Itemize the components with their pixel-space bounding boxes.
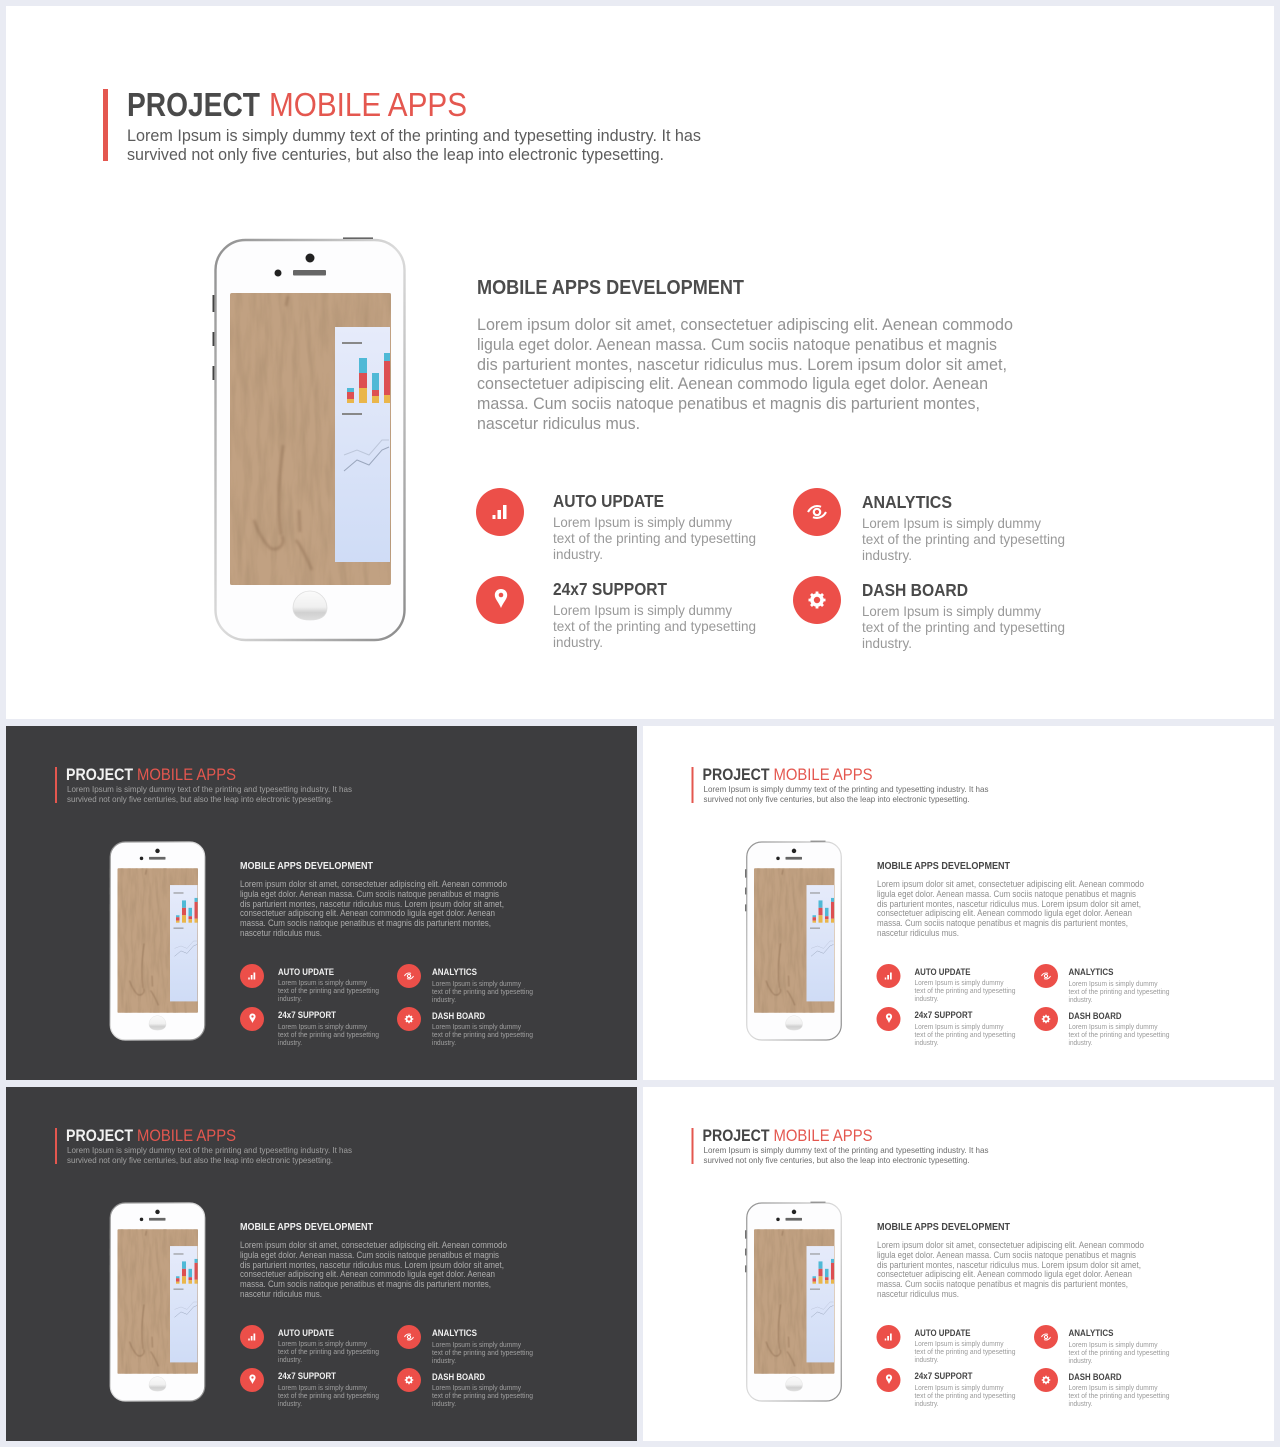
feature: auto update: text of the printing and typesetting: [278, 988, 379, 995]
accent bar: [692, 767, 694, 803]
body paragraph: dis parturient montes, nascetur ridiculus mus. Lorem ipsum dolor sit amet,: [240, 1260, 504, 1270]
body paragraph: nascetur ridiculus mus.: [877, 928, 959, 938]
body paragraph: nascetur ridiculus mus.: [477, 414, 640, 433]
accent bar: [55, 1128, 57, 1164]
feature: auto update: Lorem Ipsum is simply dummy: [914, 1341, 1004, 1348]
icon: analytics: [397, 964, 421, 988]
feature: analytics: industry.: [862, 547, 912, 563]
feature: auto update: industry.: [914, 1357, 939, 1364]
icon: analytics: [793, 488, 841, 536]
feature: analytics: ANALYTICS: [432, 967, 477, 977]
icon: 24x7 support: [876, 1007, 900, 1031]
icon: 24x7 support: [240, 1007, 264, 1031]
feature: analytics: Lorem Ipsum is simply dummy: [862, 515, 1041, 531]
panel: light slide bottom: [643, 1087, 1274, 1441]
icon: auto update: [876, 1325, 900, 1349]
feature: 24x7 support: Lorem Ipsum is simply dummy: [914, 1024, 1004, 1031]
body paragraph: dis parturient montes, nascetur ridiculus mus. Lorem ipsum dolor sit amet,: [877, 899, 1141, 909]
feature: 24x7 support: industry.: [914, 1040, 939, 1047]
body paragraph: Lorem ipsum dolor sit amet, consectetuer adipiscing elit. Aenean commodo: [877, 1240, 1144, 1250]
feature: auto update: text of the printing and typesetting: [553, 530, 756, 546]
icon: auto update: [240, 964, 264, 988]
subtitle: Lorem Ipsum is simply dummy text of the printing and typesetting industry. It has: [704, 1145, 988, 1155]
title: PROJECT: [66, 1127, 133, 1145]
feature: dash board: [432, 1011, 533, 1047]
feature: auto update: Lorem Ipsum is simply dummy: [278, 1341, 367, 1348]
feature: analytics: ANALYTICS: [862, 492, 952, 512]
feature: 24x7 support: text of the printing and typesetting: [278, 1032, 379, 1039]
feature: dash board: [1068, 1372, 1170, 1408]
feature: auto update: AUTO UPDATE: [278, 1328, 334, 1338]
panel: dark slide top: [6, 726, 637, 1080]
feature: dash board: text of the printing and typesetting: [862, 619, 1065, 635]
feature: analytics: industry.: [432, 997, 456, 1004]
accent bar: [103, 89, 108, 161]
feature: auto update: text of the printing and typesetting: [914, 1349, 1016, 1356]
feature: analytics: ANALYTICS: [1068, 1328, 1114, 1338]
phone mockup: [745, 1202, 841, 1401]
feature: dash board: Lorem Ipsum is simply dummy: [1068, 1024, 1158, 1031]
icon: dash board: [397, 1007, 421, 1031]
subtitle: survived not only five centuries, but also the leap into electronic typesetting.: [704, 794, 970, 804]
feature: 24x7 support: [278, 1010, 379, 1047]
feature: 24x7 support: industry.: [278, 1401, 302, 1408]
feature: 24x7 support: [553, 579, 756, 650]
body paragraph: [877, 1240, 1144, 1299]
title: PROJECT: [702, 1127, 770, 1145]
feature: auto update: industry.: [278, 1357, 302, 1364]
body paragraph: Lorem ipsum dolor sit amet, consectetuer adipiscing elit. Aenean commodo: [877, 879, 1144, 889]
title: MOBILE APPS: [774, 766, 872, 784]
body paragraph: ligula eget dolor. Aenean massa. Cum sociis natoque penatibus et magnis: [477, 335, 997, 354]
feature: analytics: Lorem Ipsum is simply dummy: [1068, 981, 1158, 988]
body paragraph: ligula eget dolor. Aenean massa. Cum sociis natoque penatibus et magnis: [877, 889, 1137, 899]
feature: analytics: [1068, 967, 1170, 1004]
panel: light slide top: [643, 726, 1274, 1080]
icon: auto update: [876, 964, 900, 988]
feature: auto update: Lorem Ipsum is simply dummy: [914, 980, 1004, 987]
icon: dash board: [793, 576, 841, 624]
feature: auto update: industry.: [553, 546, 603, 562]
icon: 24x7 support: [876, 1368, 900, 1392]
body paragraph: nascetur ridiculus mus.: [877, 1289, 959, 1299]
feature: analytics: industry.: [1068, 1358, 1093, 1365]
feature: auto update: AUTO UPDATE: [553, 491, 664, 511]
feature: dash board: DASH BOARD: [432, 1372, 485, 1382]
heading: MOBILE APPS DEVELOPMENT: [240, 1222, 373, 1233]
body paragraph: consectetuer adipiscing elit. Aenean commodo ligula eget dolor. Aenean: [877, 1269, 1132, 1279]
panel: main slide: [6, 6, 1274, 719]
feature: analytics: Lorem Ipsum is simply dummy: [432, 981, 521, 988]
feature: analytics: Lorem Ipsum is simply dummy: [432, 1342, 521, 1349]
feature: dash board: industry.: [862, 635, 912, 651]
feature: dash board: industry.: [1068, 1401, 1093, 1408]
subtitle: survived not only five centuries, but also the leap into electronic typesetting.: [127, 145, 664, 164]
body paragraph: ligula eget dolor. Aenean massa. Cum sociis natoque penatibus et magnis: [240, 1250, 500, 1260]
subtitle: survived not only five centuries, but also the leap into electronic typesetting.: [67, 1155, 333, 1165]
phone mockup: [745, 841, 841, 1040]
feature: dash board: Lorem Ipsum is simply dummy: [432, 1385, 521, 1392]
subtitle: Lorem Ipsum is simply dummy text of the printing and typesetting industry. It has: [67, 784, 352, 794]
subtitle: survived not only five centuries, but also the leap into electronic typesetting.: [67, 794, 333, 804]
feature: analytics: text of the printing and typesetting: [432, 989, 533, 996]
feature: dash board: industry.: [432, 1401, 456, 1408]
feature: dash board: industry.: [432, 1040, 456, 1047]
icon: 24x7 support: [476, 576, 524, 624]
title: PROJECT: [702, 766, 770, 784]
feature: 24x7 support: 24x7 SUPPORT: [553, 579, 667, 599]
body paragraph: massa. Cum sociis natoque penatibus et magnis dis parturient montes,: [877, 1279, 1128, 1289]
subtitle: [704, 784, 988, 804]
feature: analytics: Lorem Ipsum is simply dummy: [1068, 1342, 1158, 1349]
feature: analytics: [862, 492, 1065, 563]
body paragraph: [877, 879, 1144, 938]
body paragraph: Lorem ipsum dolor sit amet, consectetuer adipiscing elit. Aenean commodo: [240, 879, 507, 889]
body paragraph: [240, 879, 507, 938]
subtitle: [127, 126, 701, 164]
feature: auto update: AUTO UPDATE: [278, 967, 334, 977]
body paragraph: nascetur ridiculus mus.: [240, 1289, 322, 1299]
body paragraph: dis parturient montes, nascetur ridiculus mus. Lorem ipsum dolor sit amet,: [877, 1260, 1141, 1270]
feature: analytics: text of the printing and typesetting: [862, 531, 1065, 547]
body paragraph: ligula eget dolor. Aenean massa. Cum sociis natoque penatibus et magnis: [240, 889, 500, 899]
body paragraph: [477, 315, 1013, 433]
subtitle: Lorem Ipsum is simply dummy text of the printing and typesetting industry. It has: [127, 126, 701, 145]
feature: 24x7 support: [914, 1371, 1016, 1408]
title: MOBILE APPS: [269, 86, 467, 123]
feature: 24x7 support: text of the printing and typesetting: [553, 618, 756, 634]
feature: dash board: [862, 580, 1065, 651]
phone mockup: [109, 1202, 205, 1401]
body paragraph: consectetuer adipiscing elit. Aenean commodo ligula eget dolor. Aenean: [477, 374, 988, 393]
feature: 24x7 support: 24x7 SUPPORT: [914, 1371, 973, 1381]
heading: MOBILE APPS DEVELOPMENT: [240, 861, 373, 872]
feature: 24x7 support: industry.: [553, 634, 603, 650]
feature: auto update: text of the printing and typesetting: [914, 988, 1016, 995]
feature: dash board: Lorem Ipsum is simply dummy: [1068, 1385, 1158, 1392]
feature: 24x7 support: industry.: [278, 1040, 302, 1047]
feature: analytics: ANALYTICS: [1068, 967, 1114, 977]
phone mockup: [212, 238, 404, 640]
body paragraph: dis parturient montes, nascetur ridiculus mus. Lorem ipsum dolor sit amet,: [240, 899, 504, 909]
heading: MOBILE APPS DEVELOPMENT: [877, 1222, 1010, 1233]
body paragraph: massa. Cum sociis natoque penatibus et magnis dis parturient montes,: [240, 1279, 491, 1289]
feature: analytics: [1068, 1328, 1170, 1365]
subtitle: Lorem Ipsum is simply dummy text of the printing and typesetting industry. It has: [67, 1145, 352, 1155]
body paragraph: consectetuer adipiscing elit. Aenean commodo ligula eget dolor. Aenean: [877, 908, 1132, 918]
feature: 24x7 support: 24x7 SUPPORT: [914, 1010, 973, 1020]
feature: 24x7 support: Lorem Ipsum is simply dummy: [553, 602, 732, 618]
icon: 24x7 support: [240, 1368, 264, 1392]
feature: auto update: Lorem Ipsum is simply dummy: [553, 514, 732, 530]
title: MOBILE APPS: [137, 1127, 236, 1145]
feature: dash board: Lorem Ipsum is simply dummy: [432, 1024, 521, 1031]
feature: 24x7 support: [278, 1371, 379, 1408]
feature: auto update: industry.: [278, 996, 302, 1003]
feature: auto update: AUTO UPDATE: [914, 1328, 971, 1338]
feature: analytics: text of the printing and typesetting: [1068, 1350, 1170, 1357]
feature: dash board: DASH BOARD: [1068, 1011, 1122, 1021]
feature: auto update: [278, 967, 379, 1003]
feature: dash board: text of the printing and typesetting: [432, 1032, 533, 1039]
body paragraph: massa. Cum sociis natoque penatibus et magnis dis parturient montes,: [877, 918, 1128, 928]
body paragraph: consectetuer adipiscing elit. Aenean commodo ligula eget dolor. Aenean: [240, 908, 495, 918]
icon: analytics: [1034, 964, 1058, 988]
feature: 24x7 support: 24x7 SUPPORT: [278, 1371, 337, 1381]
title: PROJECT: [66, 766, 133, 784]
title: MOBILE APPS: [137, 766, 236, 784]
icon: auto update: [240, 1325, 264, 1349]
feature: dash board: [1068, 1011, 1170, 1047]
feature: 24x7 support: industry.: [914, 1401, 939, 1408]
feature: 24x7 support: Lorem Ipsum is simply dummy: [278, 1024, 367, 1031]
icon: dash board: [1034, 1368, 1058, 1392]
icon: analytics: [397, 1325, 421, 1349]
icon: dash board: [1034, 1007, 1058, 1031]
icon: auto update: [476, 488, 524, 536]
body paragraph: massa. Cum sociis natoque penatibus et magnis dis parturient montes,: [240, 918, 491, 928]
body paragraph: nascetur ridiculus mus.: [240, 928, 322, 938]
icon: dash board: [397, 1368, 421, 1392]
feature: 24x7 support: 24x7 SUPPORT: [278, 1010, 337, 1020]
feature: analytics: industry.: [432, 1358, 456, 1365]
feature: analytics: [432, 1328, 533, 1365]
feature: dash board: text of the printing and typesetting: [1068, 1032, 1170, 1039]
feature: auto update: industry.: [914, 996, 939, 1003]
feature: 24x7 support: text of the printing and typesetting: [914, 1032, 1016, 1039]
body paragraph: [240, 1240, 507, 1299]
feature: dash board: DASH BOARD: [432, 1011, 485, 1021]
title: PROJECT: [127, 86, 260, 123]
feature: dash board: [432, 1372, 533, 1408]
feature: dash board: Lorem Ipsum is simply dummy: [862, 603, 1041, 619]
feature: 24x7 support: Lorem Ipsum is simply dummy: [278, 1385, 367, 1392]
feature: analytics: text of the printing and typesetting: [1068, 989, 1170, 996]
feature: analytics: [432, 967, 533, 1004]
feature: dash board: DASH BOARD: [1068, 1372, 1122, 1382]
feature: analytics: ANALYTICS: [432, 1328, 477, 1338]
feature: auto update: Lorem Ipsum is simply dummy: [278, 980, 367, 987]
subtitle: [704, 1145, 988, 1165]
heading: MOBILE APPS DEVELOPMENT: [877, 861, 1010, 872]
panel: dark slide bottom: [6, 1087, 637, 1441]
feature: 24x7 support: [914, 1010, 1016, 1047]
feature: 24x7 support: Lorem Ipsum is simply dummy: [914, 1385, 1004, 1392]
accent bar: [692, 1128, 694, 1164]
body paragraph: consectetuer adipiscing elit. Aenean commodo ligula eget dolor. Aenean: [240, 1269, 495, 1279]
body paragraph: Lorem ipsum dolor sit amet, consectetuer adipiscing elit. Aenean commodo: [477, 315, 1013, 334]
body paragraph: Lorem ipsum dolor sit amet, consectetuer adipiscing elit. Aenean commodo: [240, 1240, 507, 1250]
feature: dash board: text of the printing and typesetting: [1068, 1393, 1170, 1400]
feature: dash board: industry.: [1068, 1040, 1093, 1047]
phone mockup: [109, 841, 205, 1040]
feature: dash board: DASH BOARD: [862, 580, 968, 600]
icon: analytics: [1034, 1325, 1058, 1349]
body paragraph: ligula eget dolor. Aenean massa. Cum sociis natoque penatibus et magnis: [877, 1250, 1137, 1260]
feature: auto update: [914, 1328, 1016, 1364]
subtitle: survived not only five centuries, but also the leap into electronic typesetting.: [704, 1155, 970, 1165]
subtitle: [67, 1145, 352, 1165]
feature: analytics: text of the printing and typesetting: [432, 1350, 533, 1357]
feature: auto update: AUTO UPDATE: [914, 967, 971, 977]
feature: analytics: industry.: [1068, 997, 1093, 1004]
subtitle: [67, 784, 352, 804]
feature: auto update: [553, 491, 756, 562]
feature: auto update: text of the printing and typesetting: [278, 1349, 379, 1356]
feature: 24x7 support: text of the printing and typesetting: [914, 1393, 1016, 1400]
feature: 24x7 support: text of the printing and typesetting: [278, 1393, 379, 1400]
body paragraph: dis parturient montes, nascetur ridiculus mus. Lorem ipsum dolor sit amet,: [477, 355, 1007, 374]
heading: mobile apps development: MOBILE APPS DEVELOPMENT: [477, 277, 744, 299]
subtitle: Lorem Ipsum is simply dummy text of the printing and typesetting industry. It has: [704, 784, 988, 794]
body paragraph: massa. Cum sociis natoque penatibus et magnis dis parturient montes,: [477, 394, 980, 413]
feature: auto update: [914, 967, 1016, 1003]
feature: dash board: text of the printing and typesetting: [432, 1393, 533, 1400]
accent bar: [55, 767, 57, 803]
feature: auto update: [278, 1328, 379, 1364]
title: MOBILE APPS: [774, 1127, 872, 1145]
